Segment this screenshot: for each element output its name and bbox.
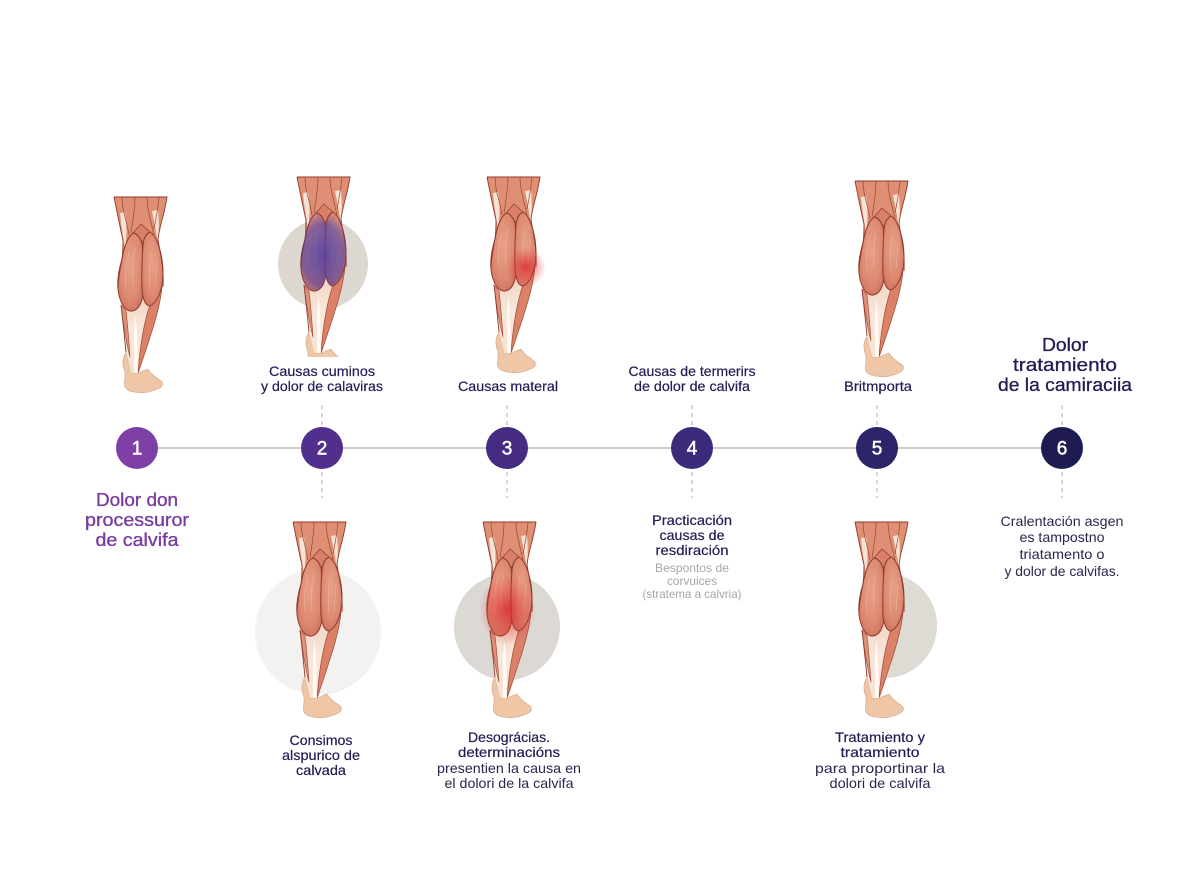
label: step 2 upper: y dolor de calaviras bbox=[261, 378, 383, 394]
heading: step 1 bbox=[85, 490, 189, 550]
text block: step 6 lower: y dolor de calvifas. bbox=[1004, 563, 1120, 579]
text block: step 5 lower bbox=[815, 729, 945, 791]
text block: step 2 lower: Consimos bbox=[290, 732, 352, 748]
text block: step 3 lower: Desográcias. bbox=[468, 729, 550, 745]
text block: step 5 lower: dolori de calvifa bbox=[830, 775, 931, 791]
step 1: leg illustration bbox=[114, 197, 167, 393]
marker 3: 3 bbox=[502, 438, 512, 460]
heading: step 6: Dolor bbox=[1042, 335, 1088, 355]
marker 3 bbox=[486, 427, 528, 469]
timeline line bbox=[137, 447, 1062, 449]
label: step 4 upper bbox=[628, 363, 756, 394]
text block: step 3 lower: determinacións bbox=[458, 744, 560, 760]
heading: step 6: de la camiraciia bbox=[998, 375, 1133, 395]
text block: step 4 lower: Practicación bbox=[652, 512, 732, 528]
marker 5 bbox=[856, 427, 898, 469]
text block: step 4 lower bbox=[642, 512, 742, 601]
connectors bbox=[322, 405, 1062, 498]
text block: step 5 lower: Tratamiento y bbox=[835, 729, 925, 745]
marker 2: 2 bbox=[317, 438, 327, 460]
text block: step 4 lower: causas de bbox=[660, 527, 725, 543]
lower leg: step 3 bbox=[454, 522, 560, 718]
heading: step 1: processuror bbox=[85, 510, 189, 530]
lower leg: step 5 bbox=[855, 522, 937, 718]
heading: step 6: tratamiento bbox=[1013, 355, 1117, 375]
text block: step 5 lower: para proportinar la bbox=[815, 760, 945, 776]
text block: step 5 lower: tratamiento bbox=[840, 744, 920, 760]
marker 4 bbox=[671, 427, 713, 469]
text block: step 6 lower: Cralentación asgen bbox=[1000, 513, 1124, 529]
step 3: leg with red spot bbox=[487, 177, 546, 373]
label: step 2 upper bbox=[261, 363, 383, 394]
label: step 3 upper: Causas materal bbox=[458, 378, 558, 394]
text block: step 4 lower: resdiración bbox=[656, 542, 728, 558]
text block: step 4 lower: corvuices bbox=[667, 574, 717, 588]
heading: step 1: Dolor don bbox=[96, 490, 178, 510]
text block: step 2 lower: alspurico de bbox=[282, 747, 360, 763]
marker 4: 4 bbox=[687, 438, 698, 460]
text block: step 6 lower: es tampostno bbox=[1020, 529, 1105, 545]
text block: step 2 lower: calvada bbox=[296, 762, 346, 778]
heading: step 1: de calvifa bbox=[96, 530, 180, 550]
lower leg: step 2 bbox=[255, 522, 381, 718]
label: step 5 upper: Britmporta bbox=[844, 378, 912, 394]
text block: step 6 lower: triatamento o bbox=[1020, 546, 1105, 562]
text block: step 4 lower: Bespontos de bbox=[655, 561, 729, 575]
label: step 4 upper: de dolor de calvifa bbox=[634, 378, 750, 394]
text block: step 4 lower: (stratema a calvria) bbox=[642, 587, 742, 601]
text block: step 2 lower bbox=[282, 732, 360, 778]
marker 2 bbox=[301, 427, 343, 469]
text block: step 3 lower: el dolori de la calvifa bbox=[444, 775, 574, 791]
label: step 4 upper: Causas de termerirs bbox=[628, 363, 756, 379]
marker 1: 1 bbox=[132, 438, 142, 460]
marker 6: 6 bbox=[1057, 438, 1067, 460]
text block: step 3 lower bbox=[437, 729, 581, 791]
text block: step 6 lower bbox=[1000, 513, 1124, 579]
step 2: leg with blue highlight bbox=[278, 177, 368, 373]
marker 1 bbox=[116, 427, 158, 469]
marker 5: 5 bbox=[872, 438, 882, 460]
marker 6 bbox=[1041, 427, 1083, 469]
heading: step 6 bbox=[998, 335, 1133, 395]
text block: step 3 lower: presentien la causa en bbox=[437, 760, 581, 776]
step 5: upper leg illustration bbox=[855, 181, 908, 377]
label: step 2 upper: Causas cuminos bbox=[269, 363, 375, 379]
